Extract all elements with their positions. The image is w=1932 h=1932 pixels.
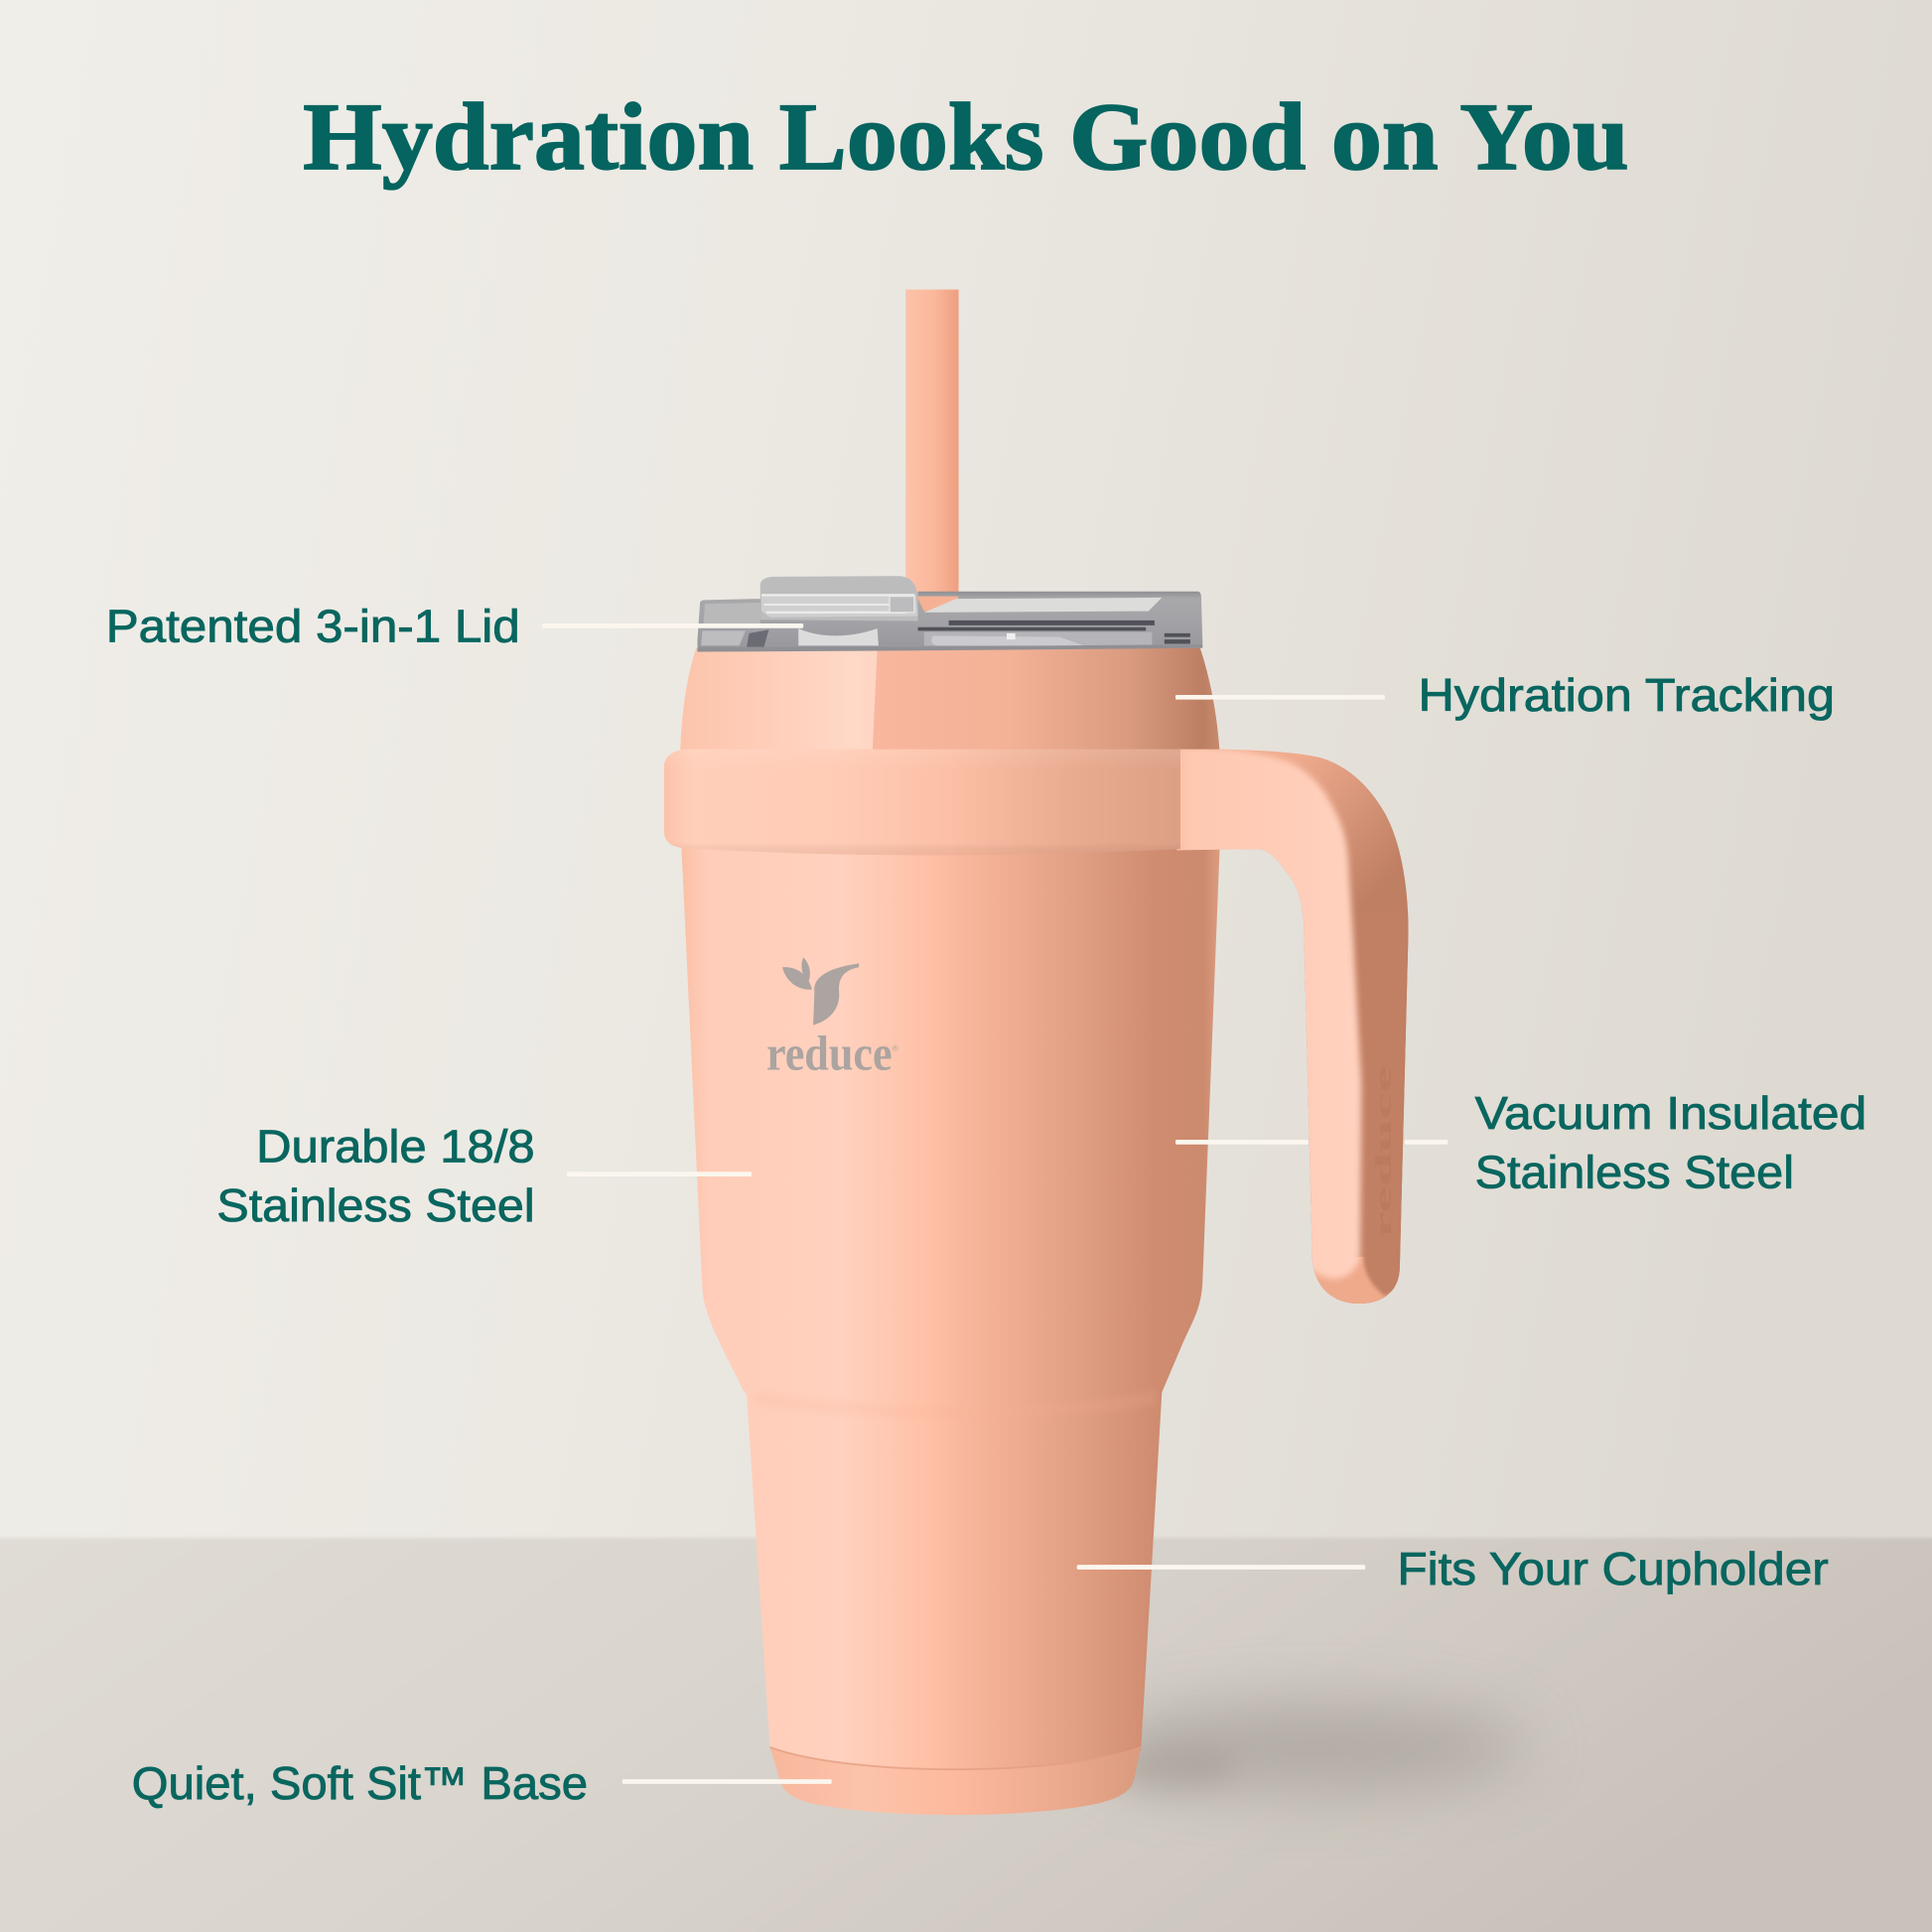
leader line right: [1405, 1140, 1448, 1145]
flap ridges: [761, 594, 914, 614]
left leaf: [782, 967, 812, 990]
leader line: [567, 1172, 752, 1176]
label text: Patented 3-in-1 Lid: [106, 601, 520, 652]
lid left lighter panel: [704, 603, 760, 623]
handle light front face: [1165, 745, 1361, 1279]
lid left shadow detail: [747, 629, 768, 647]
lid rim: [697, 592, 1202, 650]
label line one: Durable 18/8: [256, 1120, 535, 1172]
collar shading: [664, 750, 1180, 855]
label line one: Vacuum Insulated: [1475, 1087, 1866, 1139]
flip flap: [760, 576, 918, 621]
registered mark: ®: [893, 1043, 899, 1053]
base seam: [770, 1747, 1141, 1769]
taper crease: [755, 1390, 1156, 1418]
flap clip: [890, 597, 914, 613]
callout: durable stainless steel: [216, 1120, 752, 1231]
lid centre window: [798, 628, 879, 645]
top leaf: [801, 957, 810, 982]
leader line: [542, 623, 803, 628]
handle outer side: [1180, 749, 1408, 1304]
tumbler illustration: [664, 290, 1417, 1815]
callout: patented lid: [106, 601, 803, 652]
label line two: Stainless Steel: [216, 1179, 535, 1231]
leader line: [1175, 695, 1385, 700]
callout: vacuum insulated: [1175, 1087, 1866, 1197]
floor shadow of tumbler: [1097, 1706, 1528, 1789]
lid inner ridge: [931, 635, 1084, 645]
tumbler upper body right facet: [873, 648, 1220, 755]
straw: [905, 290, 959, 598]
label line two: Stainless Steel: [1475, 1146, 1794, 1197]
swoosh stem: [813, 964, 859, 1026]
label text: Hydration Tracking: [1418, 669, 1835, 721]
lid bottom edge: [697, 644, 1202, 652]
callout: soft sit base: [132, 1757, 832, 1809]
lid dark details: [918, 621, 1190, 643]
lid left lower panel: [701, 630, 746, 645]
reduce logo: [766, 957, 899, 1080]
label text: Fits Your Cupholder: [1397, 1543, 1829, 1594]
label text: Quiet, Soft Sit™ Base: [132, 1757, 588, 1809]
leader line: [1077, 1565, 1365, 1570]
lid right highlight band: [924, 598, 1162, 613]
straw through lid: [916, 597, 959, 612]
tumbler upper body left facet: [680, 648, 878, 755]
callout: hydration tracking: [1175, 669, 1835, 721]
title: Hydration Looks Good on You: [303, 83, 1629, 190]
contact shadow of tumbler: [1103, 1746, 1238, 1790]
handle: [1176, 749, 1408, 1304]
leader line: [622, 1779, 832, 1784]
lid right lower channel: [924, 632, 1152, 645]
tumbler main body and taper: [681, 845, 1220, 1774]
lid sparkle: [1007, 633, 1016, 639]
handle embossed wordmark: reduce: [1371, 1066, 1397, 1238]
lid: [697, 576, 1202, 652]
logo wordmark: reduce: [766, 1026, 893, 1080]
soft sit base: [770, 1747, 1141, 1815]
logo leaf mark: [782, 957, 859, 1026]
callout: fits your cupholder: [1077, 1543, 1829, 1594]
handle bottom cap: [1312, 1257, 1400, 1304]
silicone collar: [664, 750, 1180, 855]
leader line left: [1175, 1140, 1309, 1145]
flap light band: [761, 594, 918, 618]
background: table surface: [0, 1538, 1932, 1932]
handle dark side face: [1362, 912, 1408, 1297]
